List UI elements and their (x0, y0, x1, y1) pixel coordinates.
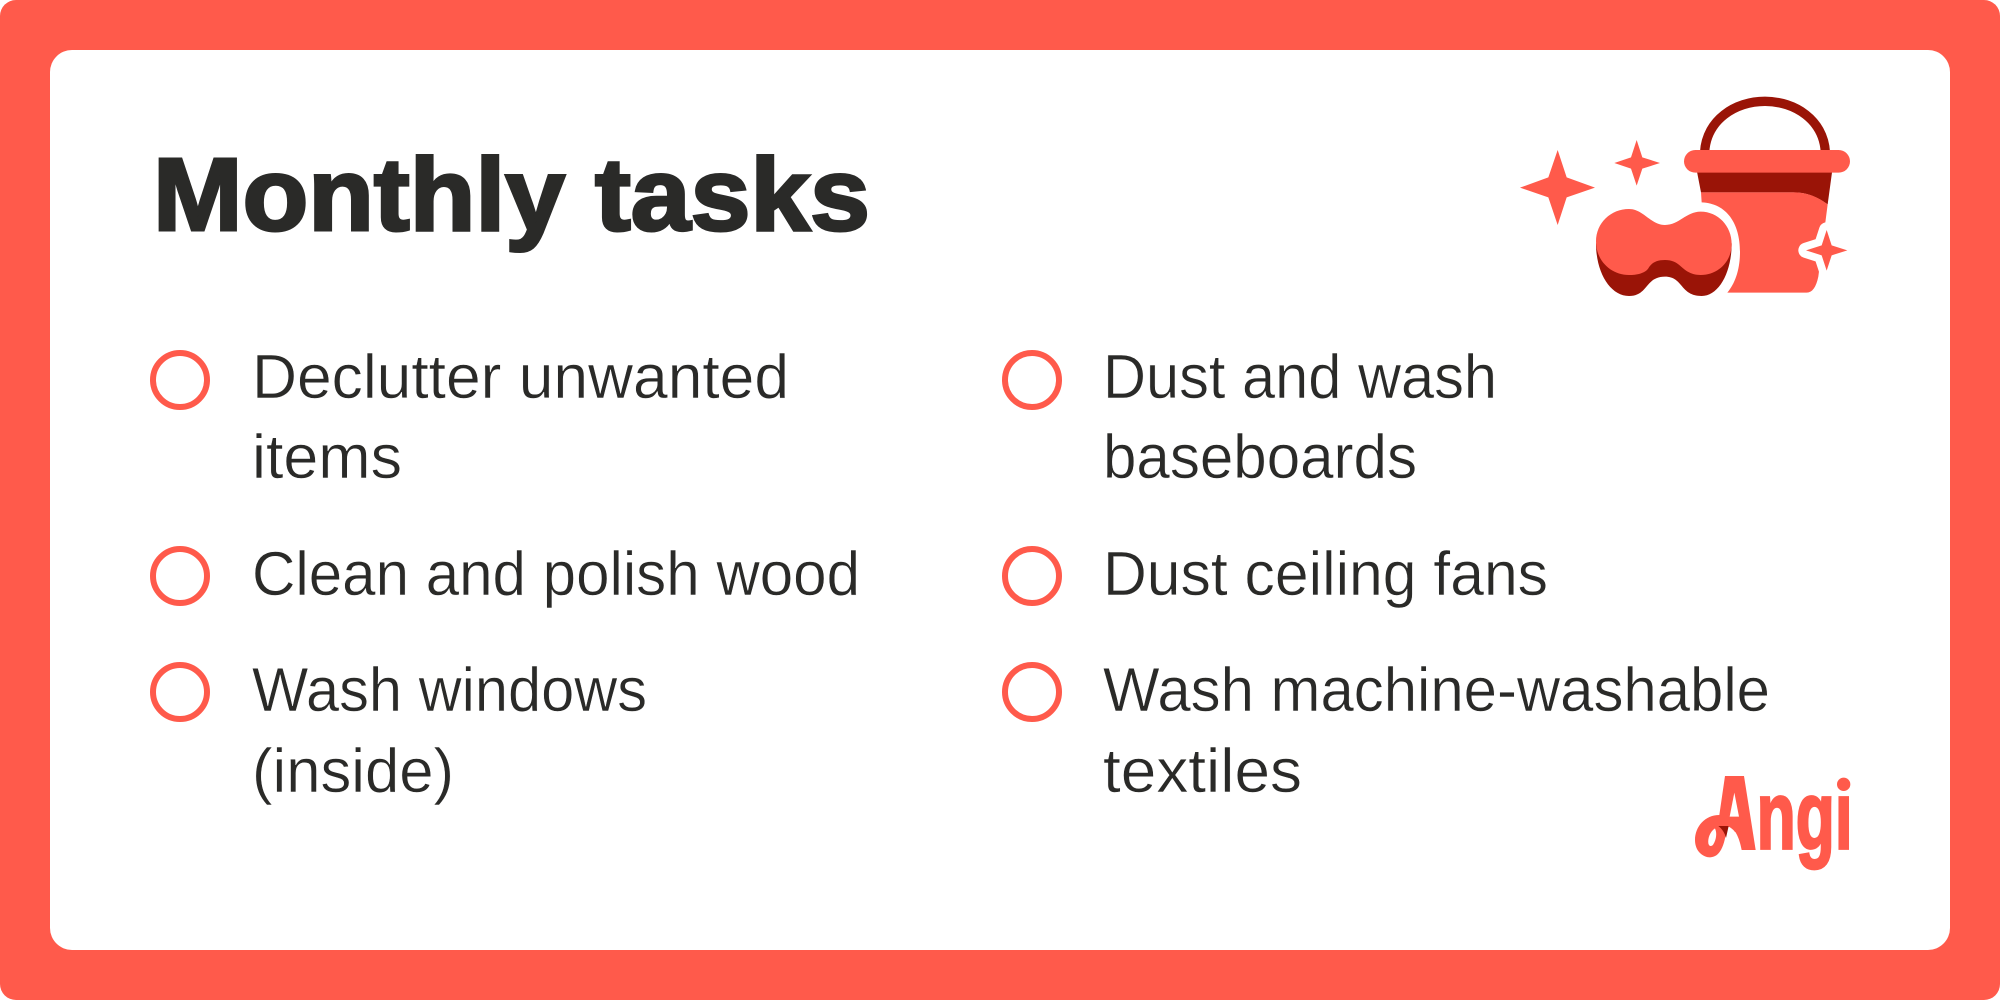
logo A counter (1730, 793, 1739, 817)
task: wash textiles (1005, 656, 1770, 806)
checkbox circle (153, 549, 207, 603)
bucket inner band (1697, 170, 1832, 204)
task: declutter (153, 343, 789, 492)
checkbox circle (1005, 353, 1059, 407)
task label (1103, 656, 1770, 806)
task: wash windows (153, 656, 647, 806)
task label (252, 343, 789, 492)
task label: (inside) (252, 737, 454, 806)
logo letter A: A (1718, 759, 1756, 871)
sparkle small halo and star (1806, 230, 1847, 271)
task label: Dust ceiling fans (1103, 540, 1548, 609)
logo swoosh shadow (1718, 826, 1729, 838)
sparkle large (1520, 150, 1595, 225)
logo letters ngi: ngi (1757, 761, 1853, 869)
task label: Wash windows (252, 656, 647, 725)
sponge underside (1596, 243, 1732, 296)
logo A shape and swoosh (1695, 776, 1756, 857)
task label: textiles (1103, 737, 1302, 806)
task label: Clean and polish wood (252, 540, 860, 609)
task: dust ceiling fans (1005, 540, 1548, 609)
checkbox circle (153, 665, 207, 719)
checkbox circle (153, 353, 207, 407)
task label (1103, 343, 1497, 492)
logo: Angi (1695, 776, 1850, 870)
task label: Wash machine-washable (1103, 656, 1770, 725)
task label (252, 656, 647, 806)
bucket body (1701, 192, 1828, 293)
logo i dot (1834, 768, 1854, 794)
sparkle medium (1614, 140, 1660, 186)
task label: baseboards (1103, 423, 1417, 492)
task label: Dust and wash (1103, 343, 1497, 412)
title: Monthly tasks (153, 137, 870, 252)
task label: Declutter unwanted (252, 343, 789, 412)
bucket handle (1705, 101, 1825, 152)
checkbox circle (1005, 549, 1059, 603)
task: clean and polish wood (153, 540, 860, 609)
sponge top (1596, 209, 1732, 275)
checkbox circle (1005, 665, 1059, 719)
logo loop hole (1708, 828, 1716, 846)
icon: bucket, sponge and sparkles (1520, 101, 1850, 296)
task label: items (252, 423, 402, 492)
task: dust and wash baseboards (1005, 343, 1497, 492)
bucket rim (1684, 150, 1850, 173)
